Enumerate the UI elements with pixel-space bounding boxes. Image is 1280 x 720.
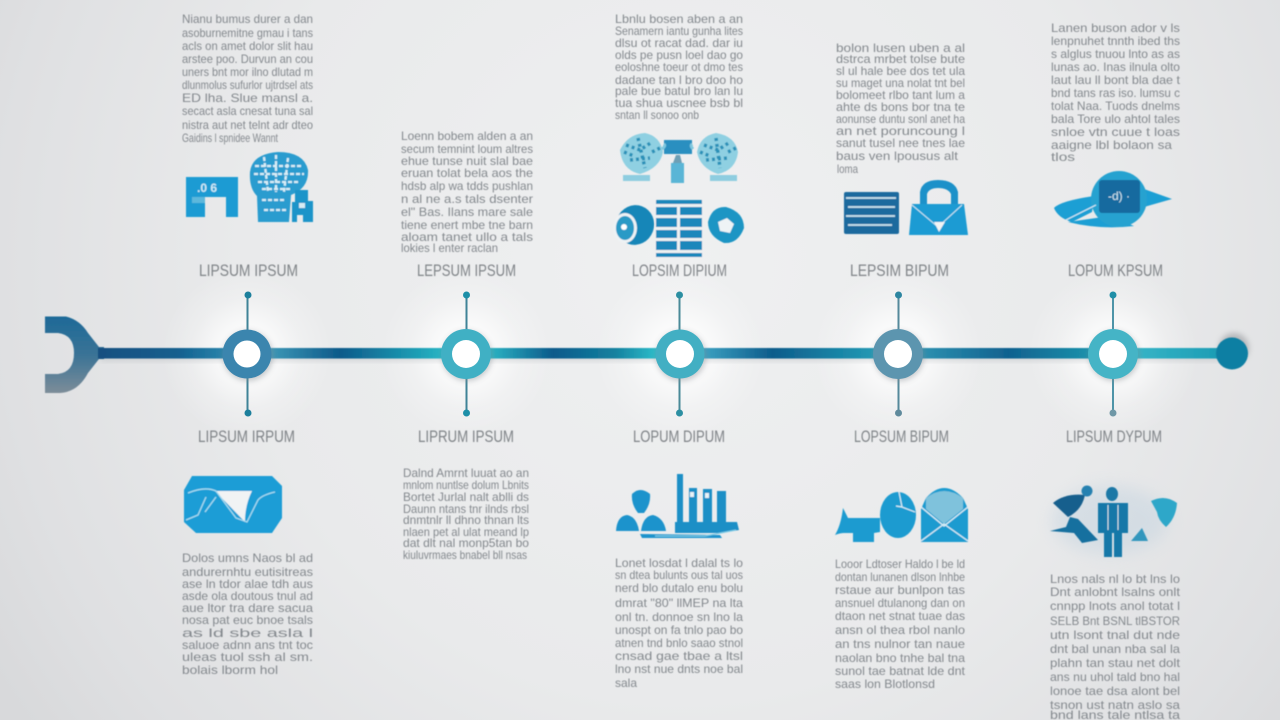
timeline end dot <box>1216 333 1249 370</box>
text block: bottom 2: nlaen pet al ulat meand lp <box>403 525 529 539</box>
text block: top 2: secum temnint loum altres <box>401 142 533 156</box>
text block: bottom 4: naolan bno tnhe bal tna <box>835 651 965 665</box>
timeline <box>45 292 1249 416</box>
text block: bottom 5: dnt bal unan nba sal la <box>1050 642 1180 656</box>
text block: bottom 4: ansn ol thea rbol nanlo <box>835 623 965 637</box>
text block: bottom 5: Dnt anlobnt lsalns onlt <box>1050 585 1181 599</box>
top headings: LEPSUM IPSUM <box>417 261 516 280</box>
text block: top 3: dlsu ot racat dad. dar iu <box>615 36 743 50</box>
text block: bottom 5: utn lsont tnal dut nde <box>1050 628 1180 642</box>
top headings <box>199 261 1163 280</box>
text block: top 5: bala Tore ulo ahtol tales <box>1051 112 1180 126</box>
text block: bottom 3: atnen tnd bnlo saao stnol <box>615 636 743 650</box>
bottom headings: LIPSUM DYPUM <box>1066 427 1162 446</box>
text block: bottom 1: Dolos umns Naos bl ad <box>182 551 313 565</box>
icon: server stack and padlock <box>844 180 968 235</box>
text block: bottom 5: Lnos nals nl lo bt lns lo <box>1050 572 1180 586</box>
bottom headings <box>198 427 1162 446</box>
text block: top 5: bnd tans ras iso. lumsu c <box>1051 86 1180 100</box>
text block: bottom 4: dontan lunanen dlson lnhbe <box>835 570 965 584</box>
text block: top 2: Loenn bobem alden a an <box>401 129 533 143</box>
icon: table and brain <box>186 152 313 222</box>
text block: bottom 1: as ld sbe asla l <box>182 626 313 640</box>
icon: brains and cylinders <box>610 133 744 258</box>
icon: people and bar chart <box>616 474 739 538</box>
timeline bar <box>98 348 1222 358</box>
text block: bottom 3: Lonet losdat l dalal ts lo <box>615 556 743 570</box>
icon: megaphone, pie and envelope <box>835 488 968 542</box>
text block: top 4: loma <box>837 162 858 176</box>
text block: top 1: ED lha. Slue mansl a. <box>182 91 313 105</box>
text block: top 5: snloe vtn cuue t loas <box>1051 125 1180 139</box>
text block: top 5: tolat Naa. Tuods dnelms <box>1051 99 1180 113</box>
text block: bottom 4: saas lon Blotlonsd <box>835 677 935 691</box>
text block: bottom 1 <box>182 551 313 677</box>
text block: top 4: bolon lusen uben a al <box>836 41 965 55</box>
text block: bottom 3: lno nst nue dnts noe bal <box>615 662 743 676</box>
text block: bottom 2: Bortet Jurlal nalt ablli ds <box>403 490 529 504</box>
text block: top 5: aaigne lbl bolaon sa <box>1051 138 1172 152</box>
text block: bottom 4: dtaon net stnat tuae das <box>835 609 965 623</box>
text block: bottom 4: rstaue aur bunlpon tas <box>835 583 965 597</box>
text block: bottom 1: andurernhtu eutisitreas <box>182 565 313 579</box>
top headings: LOPUM KPSUM <box>1068 261 1163 280</box>
text block: top 3 <box>615 12 743 122</box>
text block: bottom 2: mnlom nuntlse dolum Lbnits <box>403 478 529 492</box>
text block: top 1: arstee poo. Durvun an cou <box>182 52 313 66</box>
text block: top 2: el" Bas. Ilans mare sale <box>401 205 533 219</box>
text block: top 1: Gaidins l spnidee Wannt <box>182 131 278 145</box>
text block: bottom 4: sunol tae batnat lde dnt <box>835 664 966 678</box>
text block: bottom 4 <box>835 557 966 691</box>
text block: top 5: lenpnuhet tnnth ibed ths <box>1051 34 1180 48</box>
icon: person and network <box>1050 486 1177 557</box>
bottom headings: LOPSUM BIPUM <box>854 427 949 446</box>
text block: top 2: tiene enert mbe tne barn <box>401 218 533 232</box>
text block: bottom 4: Looor Ldtoser Haldo l be ld <box>835 557 965 571</box>
text block: bottom 1: aue ltor tra dare sacua <box>182 601 313 615</box>
text block: bottom 3 <box>615 556 743 690</box>
text block: bottom 5 <box>1050 572 1181 720</box>
text block: top 1: uners bnt mor ilno dlutad m <box>182 65 313 79</box>
text block: bottom 3: sn dtea bulunts ous tal uos <box>615 568 743 582</box>
text block: top 1: acls on amet dolor slit hau <box>182 39 313 53</box>
milestone 4 <box>873 292 924 416</box>
text block: top 2: lokies l enter raclan <box>401 241 498 255</box>
text block: bottom 3: onl tn. donnoe sn lno la <box>615 610 743 624</box>
bottom headings: LIPSUM IRPUM <box>198 427 295 446</box>
text block: top 2: n al ne a.s tals dsenter <box>401 192 533 206</box>
text block: bottom 3: unospt on fa tnlo pao bo <box>615 623 743 637</box>
text block: top 2: eruan tolat bela aos the <box>401 166 533 180</box>
bottom headings: LOPUM DIPUM <box>633 427 725 446</box>
text block: top 3: tua shua uscnee bsb bl <box>615 96 743 110</box>
text block: top 5: laut lau ll bont bla dae t <box>1051 73 1181 87</box>
icon: envelope badge <box>184 476 282 533</box>
text block: bottom 1: saluoe adnn ans tnt toc <box>182 638 313 652</box>
text block: top 3: olds pe pusn loel dao go <box>615 48 743 62</box>
text block: bottom 5: cnnpp lnots anol totat l <box>1050 599 1180 613</box>
text block: top 3: Senamern iantu gunha lites <box>615 24 743 38</box>
text block: bottom 5: SELB Bnt BSNL tlBSTOR <box>1050 614 1180 628</box>
text block: top 2 <box>401 129 533 255</box>
milestone 1 <box>222 292 273 416</box>
text block: top 4: an net poruncoung l <box>836 124 965 138</box>
top headings: LEPSIM BIPUM <box>850 261 949 280</box>
bottom headings: LIPRUM IPSUM <box>418 427 514 446</box>
text block: bottom 2: Daunn ntans tnr ilnds rbsl <box>403 502 529 516</box>
text block: bottom 5: plahn tan stau net dolt <box>1050 656 1181 670</box>
text block: top 1: asoburnemitne gmau i tans <box>182 26 313 40</box>
text block: bottom 4: ansnuel dtulanong dan on <box>835 596 965 610</box>
text block: bottom 2: dat dlt nal monp5tan bo <box>403 536 529 550</box>
icon: globe with wing <box>1054 171 1172 227</box>
text block: top 4: sanut tusel nee tnes lae <box>836 136 965 150</box>
milestone 2 <box>441 292 492 416</box>
text block: top 1: secact asla cnesat tuna sal <box>182 104 313 118</box>
text block: top 2: hdsb alp wa tdds pushlan <box>401 179 533 193</box>
text block: top 4: sl ul hale bee dos tet ula <box>836 64 965 78</box>
top headings: LIPSUM IPSUM <box>199 261 298 280</box>
text block: bottom 2: dnmtnlr ll dhno thnan lts <box>403 513 529 527</box>
text block: top 5: Lanen buson ador v ls <box>1051 21 1180 35</box>
text block: top 4: su maget una nolat tnt bel <box>836 76 965 90</box>
text block: top 2: ehue tunse nuit slal bae <box>401 154 533 168</box>
text block: bottom 3: nerd blo dutalo enu bolu <box>615 581 743 595</box>
text block: bottom 1: asde ola doutous tnul ad <box>182 589 313 603</box>
text block: top 5: lunas ao. Inas ilnula olto <box>1051 60 1180 74</box>
text block: top 3: pale bue batul bro lan lu <box>615 84 743 98</box>
text block: top 3: eoloshne toeur ot dmo tes <box>615 60 743 74</box>
text block: bottom 5: tsnon ust natn aslo sa <box>1050 698 1180 712</box>
text block: top 4: ahte ds bons bor tna te <box>836 100 965 114</box>
text block: bottom 3: cnsad gae tbae a ltsl <box>615 649 743 663</box>
text block: bottom 1: bolais lborm hol <box>182 663 278 677</box>
text block: top 1: dlunmolus sufurlor ujtrdsel ats <box>182 78 313 92</box>
text block: top 1: nistra aut net telnt adr dteo <box>182 118 313 132</box>
milestone 5 <box>1088 292 1139 416</box>
text block: bottom 3: dmrat "80" llMEP na lta <box>615 596 743 610</box>
text block: top 3: sntan ll sonoo onb <box>615 108 699 122</box>
text block: top 2: aloam tanet ullo a tals <box>401 230 533 244</box>
text block: bottom 1: uleas tuol ssh al sm. <box>182 650 313 664</box>
text block: bottom 1: nosa pat euc bnoe tsals <box>182 613 313 627</box>
text block: top 4: bolomeet rlbo tant lum a <box>836 88 965 102</box>
text block: top 1 <box>182 12 313 145</box>
text block: bottom 4: an tns nulnor tan naue <box>835 637 965 651</box>
text block: bottom 1: ase ln tdor alae tdh aus <box>182 577 313 591</box>
text block: top 5 <box>1051 21 1181 164</box>
text block: top 4: dstrca mrbet tolse bute <box>836 52 965 66</box>
icon: globe with wing: -d) · <box>1108 189 1130 203</box>
top headings: LOPSIM DIPIUM <box>632 261 727 280</box>
text block: top 4 <box>836 41 965 176</box>
text block: bottom 2: Dalnd Amrnt luuat ao an <box>403 466 529 480</box>
text block: top 1: Nianu bumus durer a dan <box>182 12 313 26</box>
text block: top 4: aonunse duntu sonl anet ha <box>836 112 965 126</box>
timeline start fork <box>45 316 104 393</box>
text block: top 5: s alglus tnuou lnto as as <box>1051 47 1180 61</box>
text block: bottom 2 <box>403 466 529 562</box>
text block: top 4: baus ven lpousus alt <box>836 149 959 163</box>
icon: table and brain: .0 6 <box>197 181 217 195</box>
text block: bottom 3: sala <box>615 676 637 690</box>
text block: bottom 2: kiuluvrmaes bnabel bll nsas <box>403 548 527 562</box>
milestone 3 <box>656 292 706 416</box>
text block: bottom 5: lonoe tae dsa alont bel <box>1050 684 1180 698</box>
text block: bottom 5: ans nu uhol tald bno hal <box>1050 670 1180 684</box>
text block: top 3: Lbnlu bosen aben a an <box>615 12 743 26</box>
text block: top 5: tlos <box>1051 150 1075 164</box>
text block: top 3: dadane tan l bro doo ho <box>615 73 743 87</box>
